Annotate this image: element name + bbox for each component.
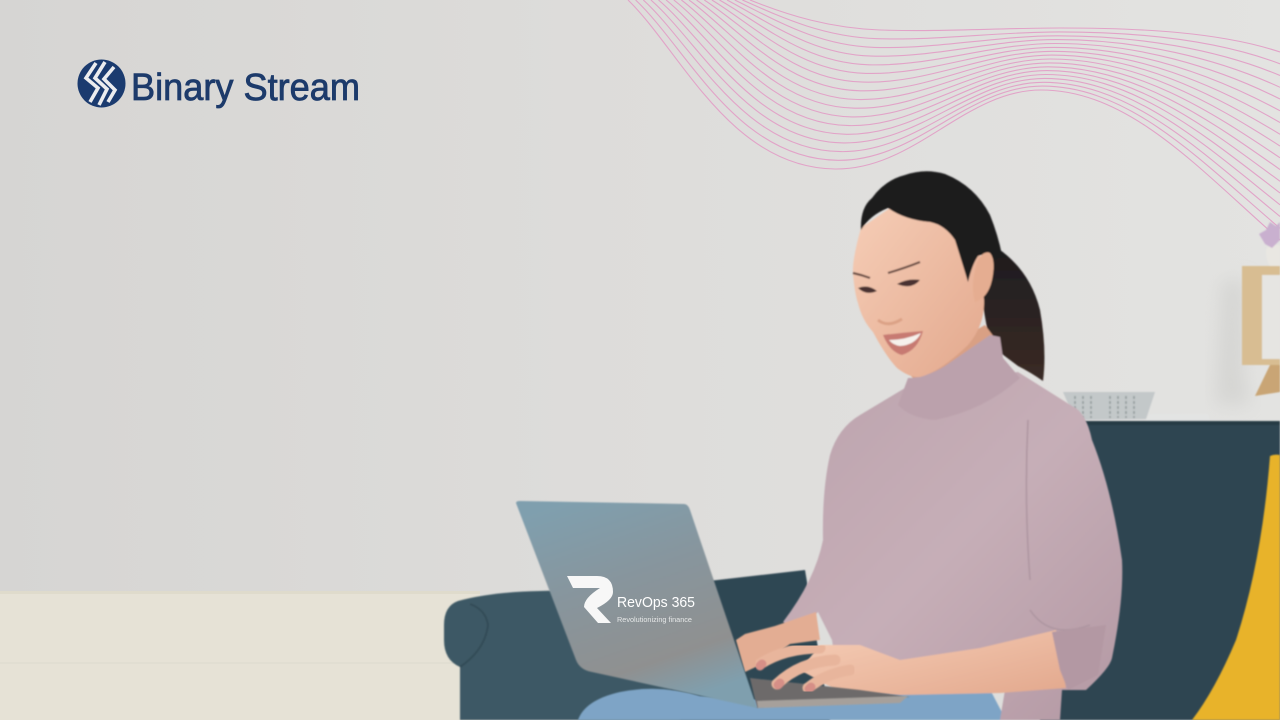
- ponytail: [982, 247, 1044, 381]
- cuff: [1052, 625, 1106, 690]
- sweater torso and sleeves: [783, 372, 1122, 720]
- shelf frame: [1242, 266, 1280, 365]
- shelf bracket: [1255, 365, 1280, 396]
- logo wordmark: Binary Stream: [131, 67, 360, 109]
- flower: [1259, 222, 1280, 248]
- shelf shadow on wall: [1215, 280, 1250, 405]
- vase: [1266, 245, 1280, 266]
- sofa backrest: [1040, 421, 1280, 720]
- far forearm and hand: [736, 612, 820, 672]
- sofa: [444, 421, 1280, 720]
- eyebrows: [853, 262, 920, 278]
- laptop base with keyboard: [750, 678, 910, 708]
- hair: [861, 171, 1002, 282]
- RevOps 365 name: RevOps 365: [617, 595, 695, 611]
- sofa rear section behind laptop: [600, 570, 830, 720]
- typing fingers: [760, 648, 850, 689]
- eyes: [858, 280, 920, 293]
- logo icon: [78, 60, 126, 108]
- ear: [973, 252, 994, 302]
- RevOps tagline: Revolutionizing finance: [617, 615, 692, 624]
- jeans: [578, 680, 1006, 720]
- neck: [905, 325, 1000, 395]
- logo: Binary Stream: [78, 60, 360, 109]
- wall shelf with vase and flower: [1242, 222, 1280, 396]
- near forearm: [800, 630, 1066, 695]
- turtleneck collar: [898, 335, 1020, 420]
- pink wave line pattern: [628, 0, 1280, 240]
- floor: [0, 591, 480, 720]
- teeth: [889, 333, 921, 346]
- nose shadow: [878, 319, 902, 324]
- RevOps 365 R mark: [567, 576, 613, 623]
- sofa armrest: [444, 588, 680, 720]
- woman working on laptop: [578, 171, 1122, 720]
- knit pillow: [1063, 392, 1210, 421]
- laptop lid: [516, 501, 757, 708]
- yellow cushion: [1192, 455, 1280, 720]
- sleeve fold: [1026, 420, 1090, 630]
- face: [853, 208, 984, 377]
- lips: [883, 331, 923, 355]
- shelf inner wall: [1262, 275, 1280, 359]
